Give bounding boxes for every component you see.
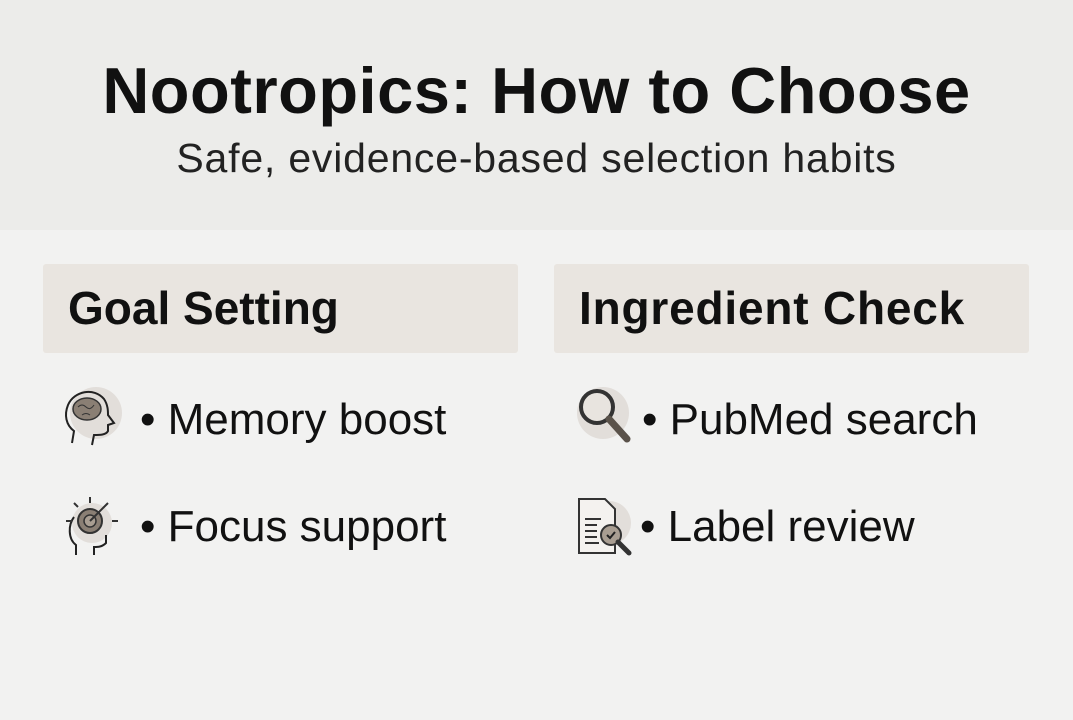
item: pubmed search: • PubMed search [642, 395, 978, 444]
subtitle: Safe, evidence-based selection habits [176, 135, 897, 181]
panel header: goal setting [43, 264, 518, 353]
panel header: ingredient check: Ingredient Check [579, 282, 965, 334]
icon: focus head [66, 497, 118, 555]
icon: brain head [65, 387, 122, 446]
panel header: goal setting: Goal Setting [68, 282, 339, 334]
icon: magnifier [577, 387, 630, 442]
title: Nootropics: How to Choose [102, 54, 971, 127]
icon: label document [578, 498, 632, 556]
header band [0, 0, 1073, 230]
item: label review: • Label review [640, 502, 915, 551]
item: focus support: • Focus support [140, 502, 446, 551]
item: memory boost: • Memory boost [140, 395, 446, 444]
panel header: ingredient check [554, 264, 1029, 353]
